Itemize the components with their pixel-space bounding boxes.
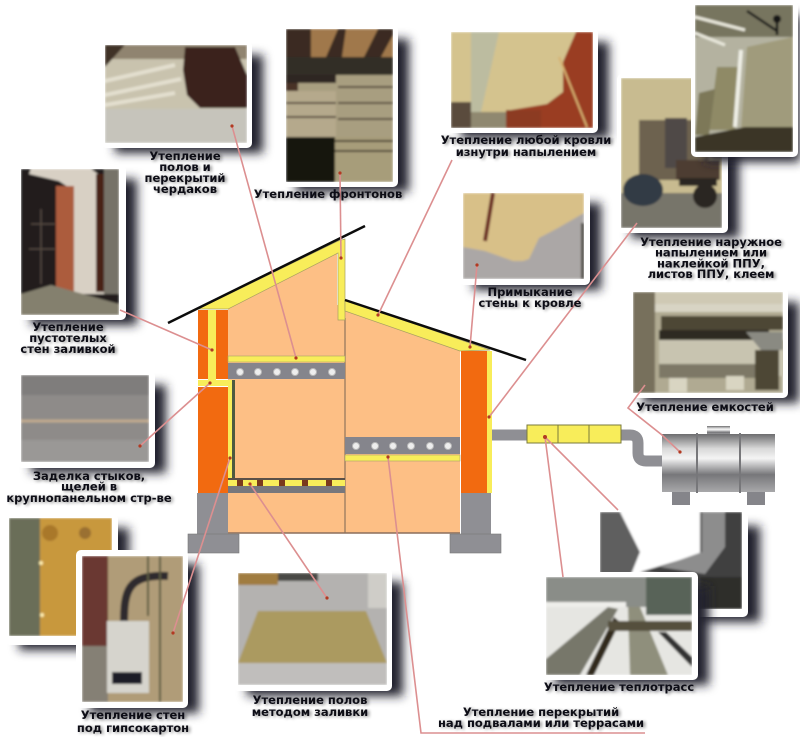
upper floor slab	[228, 356, 345, 379]
photo: heating mains	[541, 572, 709, 685]
insulated pipe section	[527, 425, 621, 443]
photo: horizontal tank	[629, 288, 799, 403]
brick wall left lower	[198, 387, 228, 493]
caption: roof: изнутри напылением	[456, 145, 596, 159]
photo: vertical tanks	[691, 1, 800, 162]
tank nozzle	[707, 426, 730, 435]
caption: attic floors: Утепление	[149, 149, 221, 163]
photo: wall and roof junction	[459, 189, 601, 290]
caption: attic floors: чердаков	[153, 182, 217, 196]
insulation junction left	[198, 380, 233, 386]
caption: panel joints: щелей в	[61, 480, 117, 494]
roof insulation right	[345, 300, 490, 351]
roof insulation left	[198, 239, 345, 320]
caption: attic floors: полов и	[159, 160, 211, 174]
caption: hollow walls: пустотелых	[29, 331, 107, 345]
centre partition	[344, 318, 346, 533]
photo: attic floors	[101, 41, 263, 153]
roof lines	[168, 226, 365, 323]
caption: exterior insulation: Утепление наружное	[640, 235, 782, 249]
caption: exterior insulation: напылением или	[655, 246, 767, 260]
caption: floors over basements: над подвалами или террасами	[438, 716, 644, 730]
caption: drywall walls: под гипсокартон	[77, 721, 189, 735]
caption: attic floors: перекрытий	[144, 171, 226, 185]
caption: heating mains: Утепление теплотрасс	[544, 680, 694, 694]
captions	[6, 133, 782, 735]
caption: tanks: Утепление емкостей	[636, 400, 774, 414]
photo: plywood wall	[5, 514, 129, 650]
lower right floor slab	[345, 437, 460, 461]
poured floor with joists	[228, 478, 345, 493]
leader lines	[120, 124, 682, 733]
photo: sprayer equipment	[617, 74, 739, 238]
caption: poured floors: Утепление полов	[253, 693, 367, 707]
brick wall right	[461, 351, 487, 493]
caption: poured floors: методом заливки	[252, 705, 368, 719]
caption: exterior insulation: листов ППУ, клеем	[648, 267, 774, 281]
caption: drywall walls: Утепление стен	[81, 708, 185, 722]
house cross-section	[168, 226, 526, 553]
caption: exterior insulation: наклейкой ППУ,	[657, 256, 765, 270]
foundations	[197, 493, 228, 534]
caption: panel joints: Заделка стыков,	[33, 469, 145, 483]
caption: floors over basements: Утепление перекрытий	[463, 705, 619, 719]
caption: wall roof junction: стены к кровле	[479, 296, 582, 310]
brick wall left upper	[198, 310, 208, 379]
caption: roof: Утепление любой кровли	[441, 133, 611, 147]
tank feet	[672, 491, 690, 505]
photo: panel joints	[17, 371, 166, 473]
photo: gables	[282, 25, 409, 192]
photo: boiler on drywall	[76, 550, 199, 713]
caption: gables: Утепление фронтонов	[254, 187, 402, 201]
pipeline and tank	[492, 425, 775, 505]
photo: hollow walls	[17, 165, 137, 325]
photo: heating main elbow	[600, 512, 760, 622]
wall insulation under drywall	[228, 386, 232, 478]
photo: poured floor	[233, 568, 403, 696]
caption: hollow walls: Утепление	[32, 320, 104, 334]
caption: hollow walls: стен заливкой	[20, 342, 116, 356]
pipe	[492, 435, 664, 461]
caption: panel joints: крупнопанельном стр-ве	[6, 491, 172, 505]
photo: roof interior spraying	[447, 28, 609, 138]
tank body	[662, 434, 775, 492]
caption: wall roof junction: Примыкание	[487, 285, 573, 299]
house body	[228, 253, 460, 533]
